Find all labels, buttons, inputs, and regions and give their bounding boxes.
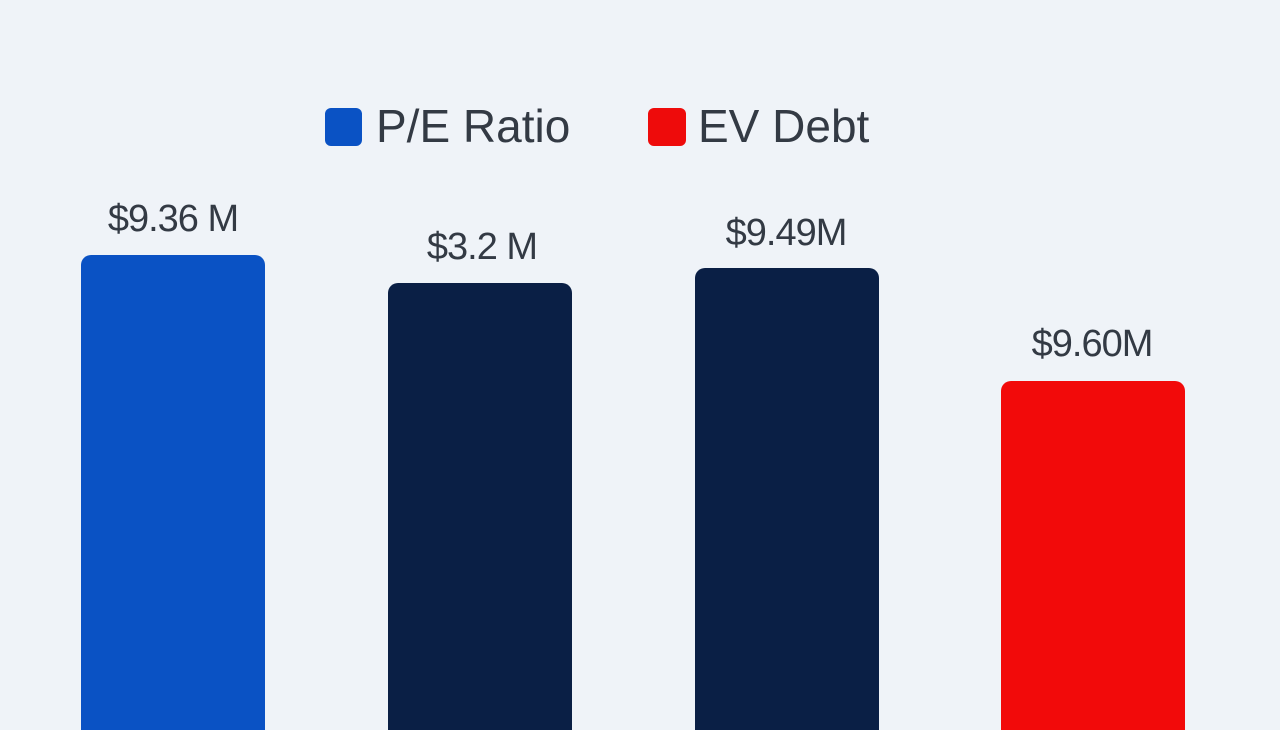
label 2: $3.2 M: [427, 226, 537, 268]
legend text: EV Debt: EV Debt: [698, 100, 869, 152]
bar 1: [81, 255, 265, 730]
legend swatch: EV Debt: [648, 108, 686, 146]
legend: [325, 100, 869, 152]
label 4: $9.60M: [1032, 323, 1152, 365]
bar 4: [1001, 381, 1185, 730]
label 1: $9.36 M: [108, 198, 238, 240]
bar 3: [695, 268, 879, 730]
legend swatch: P/E Ratio: [325, 108, 362, 146]
label 3: $9.49M: [726, 212, 846, 254]
legend text: P/E Ratio: P/E Ratio: [376, 100, 570, 152]
bar 2: [388, 283, 572, 730]
